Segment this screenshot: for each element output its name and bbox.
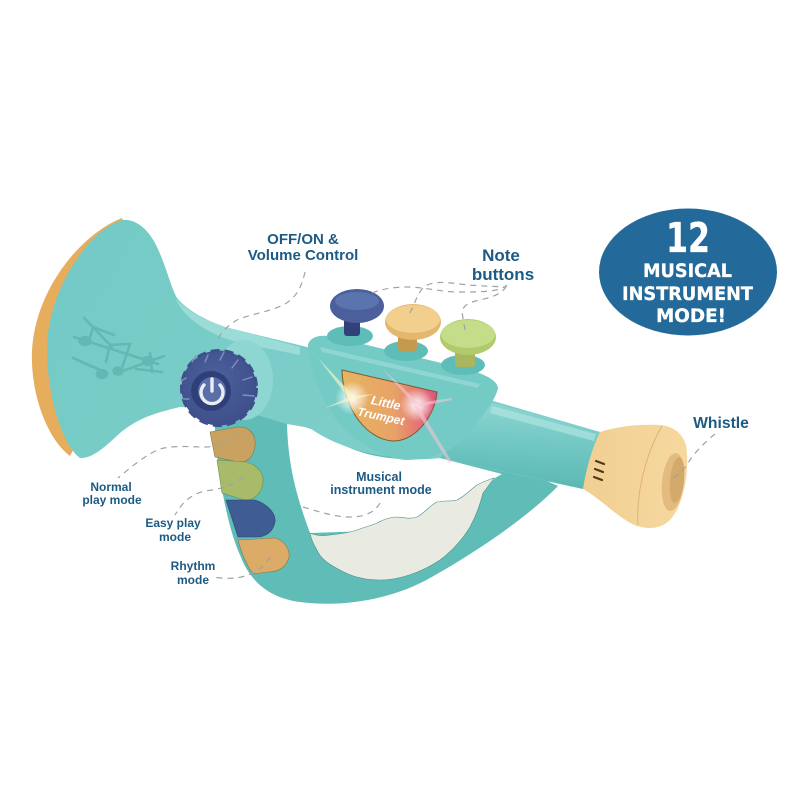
bell rim (32, 218, 130, 456)
volume knob (181, 350, 256, 426)
label: rhythm mode: Rhythm (171, 559, 215, 573)
power icon (201, 379, 223, 404)
callout line: volume (217, 272, 305, 340)
label: whistle: Whistle (693, 415, 749, 432)
label: rhythm mode: mode (177, 573, 209, 587)
label: rhythm mode (171, 559, 215, 587)
badge: 12 musical instrument mode (599, 208, 777, 336)
note button 2: yellow (384, 304, 441, 361)
label: normal play mode: Normal (90, 480, 132, 494)
label: off/on and volume control: Volume Control (248, 247, 358, 264)
valve block highlight (320, 347, 480, 388)
label: musical instrument mode (330, 470, 432, 497)
callout line: musical instrument (303, 503, 380, 517)
note button 1: blue (327, 289, 384, 346)
nameplate text (356, 391, 410, 428)
label: off/on and volume control: OFF/ON & (267, 231, 339, 248)
light-up nameplate (318, 358, 452, 463)
label: musical instrument mode: instrument mode (330, 483, 432, 497)
tube front section (440, 402, 600, 489)
sparkle lights (318, 358, 452, 463)
rhythm button (238, 538, 289, 574)
mouthpiece vents (594, 461, 604, 480)
blue mode button (226, 500, 275, 537)
white grip (310, 478, 494, 580)
easy play button (217, 460, 263, 500)
music notes emboss (73, 318, 164, 378)
callout line: easy play (175, 477, 243, 515)
badge: 12 musical instrument mode: MODE! (656, 305, 726, 327)
nameplate text: Trumpet (356, 405, 407, 428)
callout line: normal play (118, 433, 240, 478)
handle (215, 400, 558, 604)
label: note buttons: buttons (472, 265, 534, 284)
knob collar (215, 340, 273, 420)
callout line: note button 3 (462, 285, 507, 330)
label: normal play mode (82, 480, 142, 507)
valve block (308, 336, 498, 460)
handle window (287, 424, 502, 533)
nameplate text: Little (370, 393, 402, 413)
tube highlight (175, 298, 300, 355)
badge: 12 musical instrument mode: MUSICAL (643, 260, 732, 282)
mouthpiece (583, 425, 687, 528)
label: note buttons (472, 246, 534, 284)
badge: 12 musical instrument mode: 12 (666, 214, 710, 262)
mode buttons (210, 427, 289, 574)
label: note buttons: Note (482, 246, 520, 265)
tube sheen (490, 406, 596, 441)
callout line: rhythm (213, 557, 270, 578)
toy trumpet illustration (32, 218, 687, 604)
label: easy play mode: Easy play (145, 516, 201, 530)
label: musical instrument mode: Musical (356, 470, 402, 484)
label: easy play mode: mode (159, 530, 191, 544)
note button 3: green (440, 319, 496, 375)
callout line: note button 1 (372, 285, 507, 293)
trumpet body (47, 220, 600, 489)
label: normal play mode: play mode (82, 493, 142, 507)
normal play button (210, 427, 255, 462)
callout line: note button 2 (410, 282, 504, 313)
label: off/on and volume control (248, 231, 358, 264)
label: easy play mode (145, 516, 201, 544)
callout line: whistle (668, 434, 715, 479)
badge: 12 musical instrument mode: INSTRUMENT (622, 283, 753, 305)
